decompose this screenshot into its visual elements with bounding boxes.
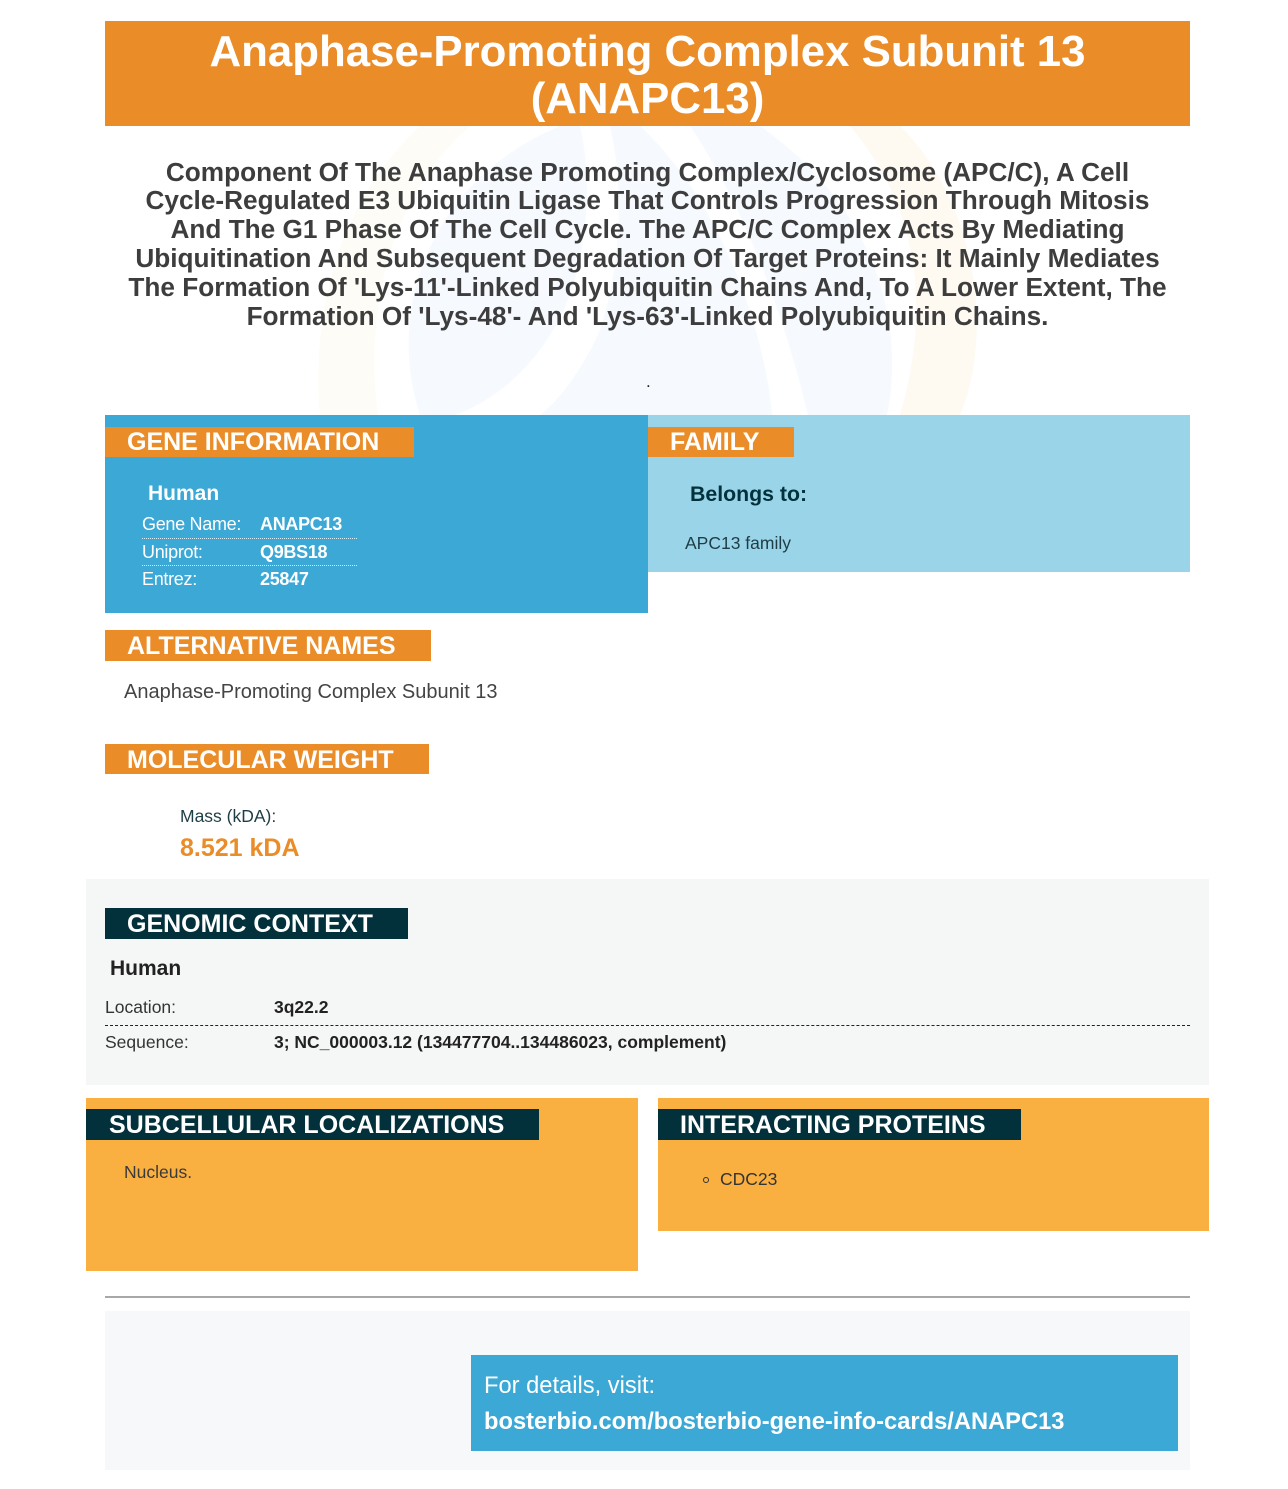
- description text: The Formation Of 'Lys-11'-Linked Polyubiquitin Chains And, To A Lower Extent, The: [128, 272, 1167, 302]
- heading: subcellular localizations: SUBCELLULAR LOCALIZATIONS: [109, 1111, 504, 1139]
- localization text: Nucleus.: [124, 1162, 192, 1182]
- location row: Location:: [105, 997, 176, 1017]
- protein list item: CDC23: [720, 1169, 777, 1189]
- panel: subcellular localizations: [86, 1098, 638, 1271]
- gene info table: Q9BS18: [260, 542, 327, 562]
- heading: molecular weight: MOLECULAR WEIGHT: [127, 746, 394, 774]
- heading: interacting proteins: INTERACTING PROTEINS: [680, 1111, 986, 1139]
- description text: And The G1 Phase Of The Cell Cycle. The APC/C Complex Acts By Mediating: [170, 214, 1125, 244]
- mass block: [180, 806, 300, 862]
- period mark: .: [646, 372, 651, 391]
- sequence row: Sequence:: [105, 1032, 189, 1052]
- title: [105, 21, 1190, 126]
- heading: alternative names: ALTERNATIVE NAMES: [127, 632, 396, 660]
- description text: Formation Of 'Lys-48'- And 'Lys-63'-Linked Polyubiquitin Chains.: [247, 301, 1048, 331]
- background watermark: [318, 126, 976, 415]
- sequence row: 3; NC_000003.12 (134477704..134486023, complement): [274, 1032, 726, 1052]
- description text: Ubiquitination And Subsequent Degradation Of Target Proteins: It Mainly Mediates: [135, 243, 1160, 273]
- title: (ANAPC13): [531, 74, 764, 123]
- heading: family: [648, 427, 794, 457]
- description text: Component Of The Anaphase Promoting Complex/Cyclosome (APC/C), A Cell: [166, 157, 1129, 187]
- species label: Human: [148, 482, 219, 505]
- description text: Cycle-Regulated E3 Ubiquitin Ligase That Controls Progression Through Mitosis: [146, 185, 1149, 215]
- details callout: bosterbio.com/bosterbio-gene-info-cards/ANAPC13: [484, 1409, 1064, 1435]
- details callout: [471, 1355, 1178, 1451]
- gene info table: Uniprot:: [142, 542, 203, 562]
- panel: interacting proteins: [658, 1098, 1209, 1231]
- panel: gene information: [105, 415, 648, 613]
- panel: family: [648, 415, 1190, 572]
- location row: 3q22.2: [274, 997, 328, 1017]
- mass block: Mass (kDA):: [180, 806, 276, 826]
- details callout: For details, visit:: [484, 1373, 655, 1399]
- panel: genomic context: [86, 879, 1209, 1085]
- alternative names text: Anaphase-Promoting Complex Subunit 13: [124, 681, 498, 703]
- gene info table: 25847: [260, 569, 309, 589]
- mass block: 8.521 kDA: [180, 834, 300, 862]
- heading: family: FAMILY: [670, 428, 759, 456]
- footer panel: [105, 1311, 1190, 1470]
- gene info table: ANAPC13: [260, 514, 342, 534]
- gene info table: Gene Name:: [142, 514, 241, 534]
- gene info table: Entrez:: [142, 569, 197, 589]
- belongs to label: Belongs to:: [690, 482, 807, 506]
- family value: APC13 family: [685, 533, 791, 553]
- heading: genomic context: GENOMIC CONTEXT: [127, 910, 373, 938]
- location row: [105, 995, 1190, 1026]
- title: Anaphase-Promoting Complex Subunit 13: [209, 27, 1086, 76]
- heading: gene information: GENE INFORMATION: [127, 428, 379, 456]
- gene info table: [142, 514, 357, 589]
- description text: [128, 157, 1167, 331]
- species label: Human: [110, 957, 181, 980]
